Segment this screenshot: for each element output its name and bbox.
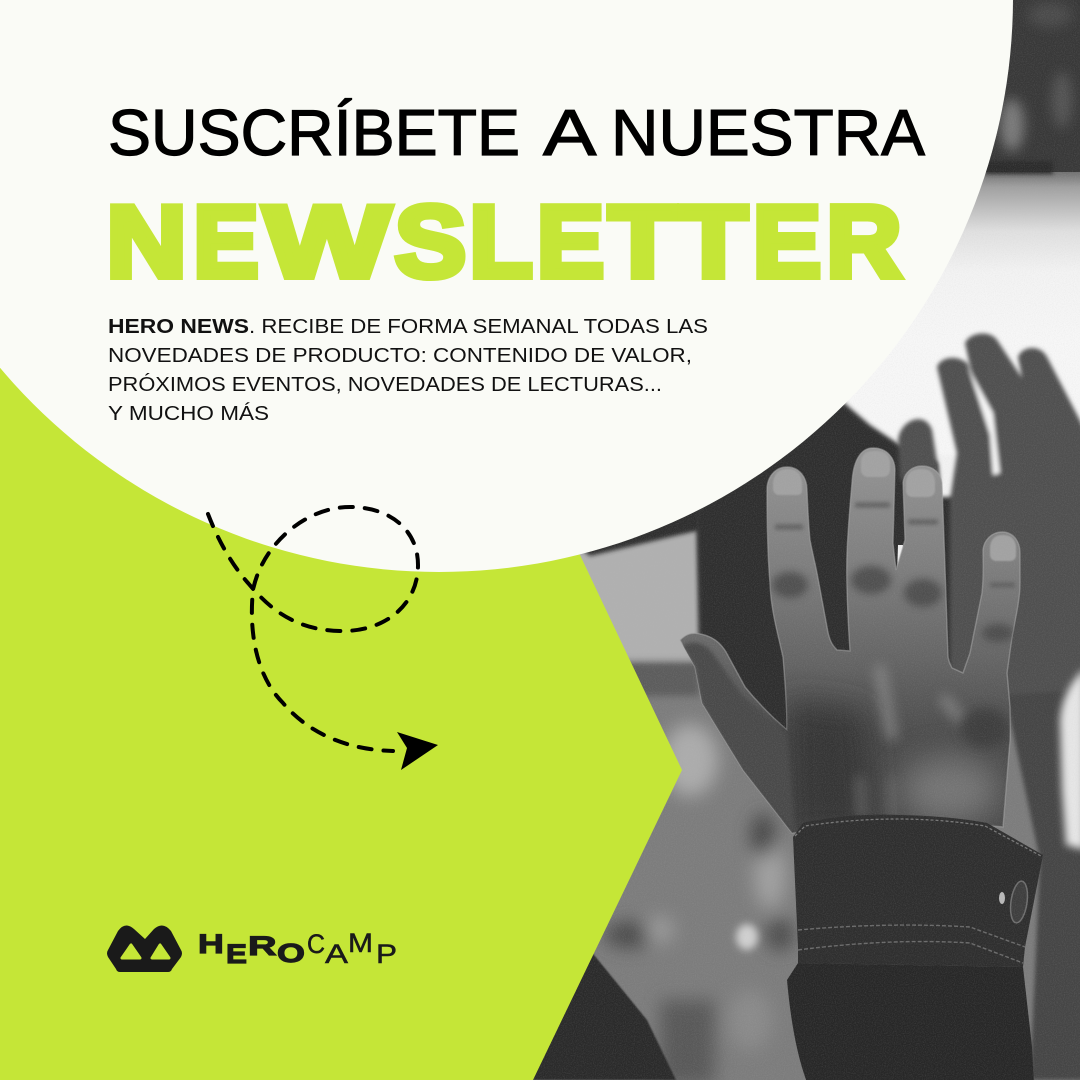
photo: blurred crowd below the hand [604,724,794,1080]
heading: newsletter: T [680,186,747,298]
photo: bright blur on the far right [1060,668,1080,850]
hand: tendon highlights [860,670,960,815]
cuff: second lower stitching [798,942,1023,963]
photo: bright background behind the hands [760,170,1080,510]
heading: newsletter: R [826,186,902,298]
rear hand: small finger [898,419,940,480]
panel: off-white circle [0,0,1013,572]
photo: blurred dark top right background [960,0,1080,174]
heading: newsletter: L [470,186,532,298]
logo wordmark: A [325,939,348,969]
photo: main raised hand [680,448,1020,835]
hand: thumb [682,643,795,835]
hand: joint creases [775,505,1015,585]
cuff: lower stitching [798,925,1025,947]
cuff: button [1008,880,1030,924]
arrow: dashed looping arrow [208,507,438,770]
hand: knuckles [772,566,1014,642]
photo: arm of rear hand [1005,690,1080,1080]
cuff: top stitching [795,819,1041,856]
heading: newsletter: E [753,186,821,298]
photo: bright gap between fingers [897,545,904,655]
hand: shading inside the outline [682,451,1016,835]
hand: light lower right palm [900,756,1000,824]
photo: white patch next to ring finger [938,455,958,497]
title: suscríbete a nuestra: NUESTRA [611,96,926,169]
logo wordmark: P [376,939,397,969]
rear hand: palm and fingers [937,334,1080,705]
heading: newsletter: T [609,186,676,298]
text block: description: HERO NEWS [108,316,249,338]
logo wordmark: M [348,928,373,958]
text block: description: PRÓXIMOS EVENTOS, NOVEDADES DE LECTURAS... [108,373,662,396]
heading: newsletter: S [395,186,466,298]
text block: description [108,316,708,425]
photo: denim cuff [793,815,1043,967]
photo: dark figure behind the hand [696,395,960,740]
photo: dark sleeve of the jacket [787,963,1034,1080]
photo: blurred rear hand [898,334,1080,705]
photo: dark band beside the thumb [570,662,700,696]
logo wordmark: O [277,938,305,968]
heading: newsletter: W [264,186,391,298]
photo: dark wedge under the circle [570,495,700,556]
heading: newsletter: E [194,186,258,298]
photo: dark sleeve bottom left [520,950,676,1080]
logo icon [107,925,182,972]
hand: dark pinky base [961,708,1009,748]
text block: description: NOVEDADES DE PRODUCTO: CONTENIDO DE VALOR, [108,345,692,367]
rear hand: white gap between fingers [968,367,1000,475]
logo wordmark: E [226,939,247,969]
logo wordmark: H [198,929,224,959]
title: suscríbete a nuestra: A [543,96,597,169]
logo wordmark: C [307,929,325,959]
title: suscríbete a nuestra: SUSCRÍBETE [108,96,520,169]
hand: dark left palm [787,700,875,835]
cuff: button highlight [999,892,1005,904]
photo: film grain [530,0,1080,1080]
hand: finger nails [773,451,1016,561]
text block: description: Y MUCHO MÁS [108,402,269,425]
text block: description: . RECIBE DE FORMA SEMANAL TODAS LAS [249,316,708,338]
logo: herocamp [107,925,397,972]
logo wordmark [198,928,397,969]
photo: grey blurred wall left of the hand [570,530,698,665]
heading: newsletter: N [106,186,186,298]
photo: bright blurred spot [736,924,758,950]
heading: newsletter: E [537,186,604,298]
logo wordmark: R [248,931,277,961]
panel: black and white photo of raised hands [533,0,1080,1080]
panel: lime green pointed shape [0,300,682,1080]
